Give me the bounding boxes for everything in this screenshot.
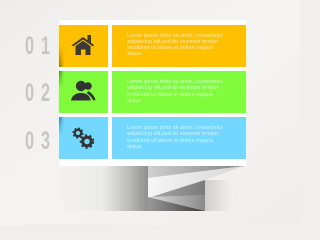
number 02: 02 xyxy=(24,78,56,106)
row 3 text xyxy=(127,125,223,150)
row 1 text: incididunt ut labore et dolore magna xyxy=(127,45,213,51)
white panel xyxy=(59,20,246,166)
row 2 icon cell xyxy=(59,71,108,113)
row 1 text: aliqua xyxy=(127,51,141,57)
number 01: 01 xyxy=(24,32,56,60)
row 3 icon cell xyxy=(59,117,108,159)
row 3 text: aliqua xyxy=(127,144,141,150)
row 3 text: incididunt ut labore et dolore magna xyxy=(127,138,213,144)
row 2 text: incididunt ut labore et dolore magna xyxy=(127,92,213,98)
row 2 text cell xyxy=(112,71,246,113)
row 3 text: Lorem ipsum dolor sit amet, consectetur xyxy=(127,125,223,131)
row 3 text cell xyxy=(112,117,246,159)
row 1 text cell xyxy=(112,25,246,67)
row 1 text xyxy=(127,32,223,57)
icon: gears xyxy=(72,128,94,149)
number 03: 03 xyxy=(24,126,56,154)
row 2 text: Lorem ipsum dolor sit amet, consectetur xyxy=(127,79,223,85)
row 3 text: adipisicing elit,sed do eiusmod tempor xyxy=(127,131,218,137)
row 2 text: adipisicing elit,sed do eiusmod tempor xyxy=(127,85,218,91)
row 1 text: adipisicing elit,sed do eiusmod tempor xyxy=(127,39,218,45)
icon: house xyxy=(72,35,94,55)
row 2 text xyxy=(127,79,223,104)
row 2 text: aliqua xyxy=(127,98,141,104)
icon: people xyxy=(71,80,96,100)
row 1 text: Lorem ipsum dolor sit amet, consectetur xyxy=(127,32,223,38)
row 1 icon cell xyxy=(59,25,108,67)
left edge shadows xyxy=(59,47,64,134)
